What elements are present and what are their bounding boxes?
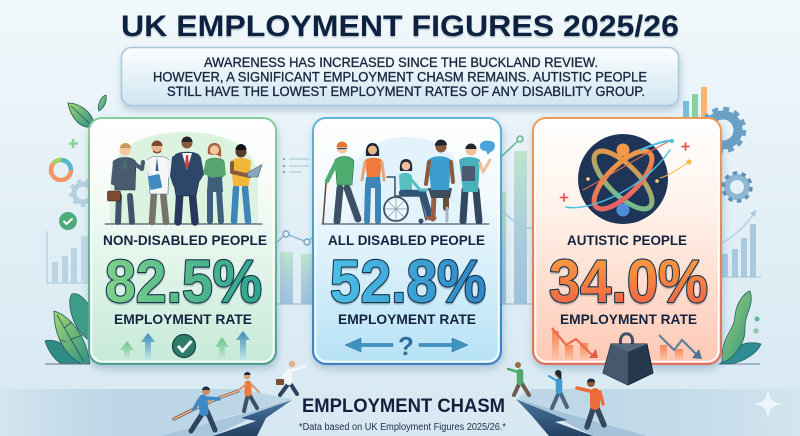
big number: 34.0% [549,248,708,315]
figures walking, right side [508,362,604,427]
right background decoration [683,87,782,418]
big number: 52.8% [330,248,486,315]
question and arrows [345,331,468,361]
worker 1 [108,143,143,222]
centre chart between cards 1 and 2 [276,158,314,304]
person in orange [577,378,604,427]
worker 3 [172,136,202,222]
falling chart: orange [552,328,598,360]
falling chart: grey [659,335,702,360]
icon: leaves top left [68,95,106,127]
centre chart between cards 2 and 3 [500,136,534,304]
intro text: HOWEVER, A SIGNIFICANT EMPLOYMENT CHASM REMAINS. AUTISTIC PEOPLE [153,70,647,84]
intro text [153,55,647,99]
decorative dots [753,316,760,334]
label: AUTISTIC PEOPLE [567,232,687,248]
sublabel: EMPLOYMENT RATE [338,311,476,327]
person with prosthetic leg [426,139,453,221]
left background decoration [45,95,106,364]
top mini bars [683,87,707,119]
woman in orange [238,372,259,411]
man with briefcase [276,361,305,395]
person with tablet [459,141,495,221]
illustration: five disabled people [322,137,495,224]
person with cane [323,142,358,223]
intro text panel [122,48,678,106]
panel: autistic people [533,118,721,364]
man in blue [191,386,219,431]
label: NON-DISABLED PEOPLE [103,232,267,248]
label: ALL DISABLED PEOPLE [328,232,485,248]
sublabel: EMPLOYMENT RATE [560,311,697,327]
right bar chart [722,210,761,277]
rope [174,391,238,419]
icon: brain [480,141,495,155]
big number: 82.5% [105,248,262,315]
icon: check badge [59,212,77,230]
icon: autism interlocking symbol [560,134,692,224]
icon: leaf bottom right [718,291,761,364]
heading: employment chasm: EMPLOYMENT CHASM [302,395,505,417]
card background [313,118,501,364]
panel: all disabled people [313,118,501,364]
icon: donut ring [51,160,71,180]
figures pulling rope, left side [174,361,305,431]
icon: sparkle [754,390,782,418]
footnote: *Data based on UK Employment Figures 2025/26.* [299,422,506,433]
icon: small gear [723,173,751,201]
icon: large gear [702,109,744,151]
worker 2 [147,140,170,222]
illustration: left cliff [213,400,292,436]
icon: leaves bottom left [45,294,90,364]
left bar chart [47,231,90,283]
illustration: right cliff [516,399,593,436]
intro text: AWARENESS HAS INCREASED SINCE THE BUCKLAND REVIEW. [204,55,598,70]
sublabel: EMPLOYMENT RATE [114,311,252,327]
person in wheelchair [384,159,435,224]
person in green [508,362,529,395]
intro text: STILL HAVE THE LOWEST EMPLOYMENT RATES OF ANY DISABILITY GROUP. [167,84,645,99]
chasm ground bands [0,389,800,436]
card background [89,118,276,364]
card background [533,118,721,364]
person in orange [362,143,384,221]
title: UK EMPLOYMENT FIGURES 2025/26 [121,10,679,43]
up arrows and check [120,331,250,360]
illustration: five workers [105,132,262,224]
person in blue [549,370,567,408]
worker 4 [205,143,224,221]
worker 5 [231,144,262,221]
panel: non-disabled people [89,118,276,364]
icon: heavy weight [603,334,653,385]
icon: pale gear [71,181,95,205]
question and arrows: ? [398,331,414,361]
icon: plus [69,139,78,148]
